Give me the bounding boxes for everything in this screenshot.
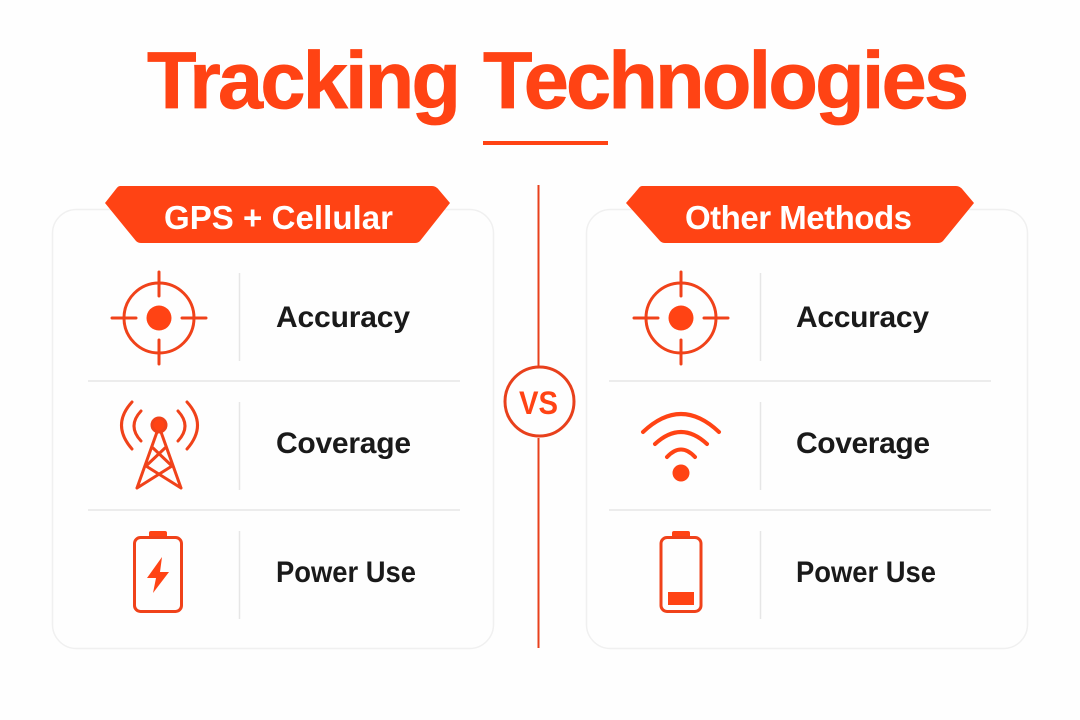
icon: low battery — [661, 531, 701, 612]
label: Power Use: Power Use — [276, 556, 416, 589]
icon: target — [112, 272, 206, 364]
title underline — [483, 141, 608, 145]
panel header: Other Methods — [626, 186, 974, 243]
label: Accuracy: Accuracy — [276, 301, 410, 334]
row dividers — [88, 273, 460, 619]
label: Accuracy: Accuracy — [796, 301, 929, 334]
title: Technologies — [483, 36, 969, 126]
center divider line — [538, 185, 540, 648]
icon: cell tower — [122, 402, 198, 488]
icon: charging battery — [134, 531, 182, 612]
panel header: Other Methods: Other Methods — [685, 199, 912, 236]
icon: target — [634, 272, 728, 364]
panel: GPS + Cellular — [52, 186, 494, 648]
row dividers — [609, 273, 991, 619]
title: Tracking — [147, 36, 461, 126]
vs badge: VS — [519, 385, 558, 421]
vs badge — [505, 367, 574, 436]
panel: Other Methods — [586, 186, 1028, 648]
icon: wifi — [643, 414, 719, 482]
label: Coverage: Coverage — [276, 427, 411, 460]
label: Power Use: Power Use — [796, 556, 936, 589]
label: Coverage: Coverage — [796, 427, 930, 460]
panel header: GPS + Cellular: GPS + Cellular — [164, 199, 393, 236]
panel header: GPS + Cellular — [105, 186, 450, 243]
